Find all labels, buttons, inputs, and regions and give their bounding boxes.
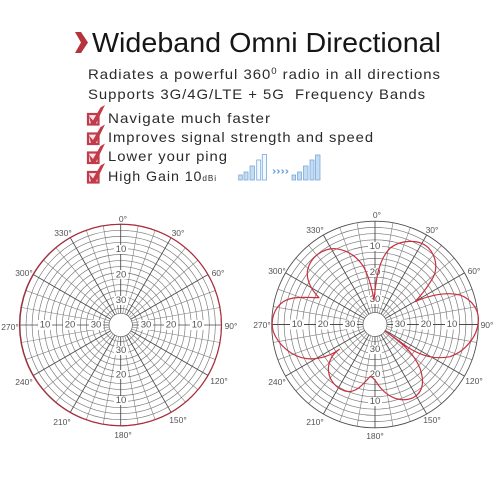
item: navigate: Navigate much faster bbox=[108, 110, 271, 126]
left angle labels: 60° bbox=[212, 268, 224, 278]
left angle labels: 150° bbox=[169, 415, 187, 425]
left angle labels: 240° bbox=[15, 377, 33, 387]
right angle labels: 150° bbox=[423, 415, 441, 425]
left angle labels: 90° bbox=[225, 321, 237, 331]
right angle labels: 60° bbox=[468, 266, 480, 276]
right angle labels: 210° bbox=[306, 417, 324, 427]
icon: red chevron bbox=[75, 32, 88, 53]
right radial scale labels: 10 bbox=[447, 319, 457, 330]
left angle labels bbox=[1, 214, 237, 440]
left angle labels: 270° bbox=[1, 322, 19, 332]
right angle labels: 180° bbox=[366, 431, 384, 441]
right angle labels: 240° bbox=[268, 377, 286, 387]
right angle labels: 300° bbox=[268, 266, 286, 276]
right radial scale labels bbox=[290, 241, 459, 407]
left angle labels: 330° bbox=[54, 228, 72, 238]
left radial scale labels: 10 bbox=[116, 395, 126, 406]
chart: left polar omni pattern bbox=[1, 214, 237, 440]
right radial scale labels: 20 bbox=[318, 319, 328, 330]
title: Wideband Omni Directional bbox=[92, 27, 441, 58]
left radial scale labels: 30 bbox=[116, 345, 126, 356]
right angle labels: 0° bbox=[373, 210, 381, 220]
left radial scale labels: 30 bbox=[141, 320, 151, 330]
item: lower ping: Lower your ping bbox=[108, 148, 228, 164]
right angle labels: 120° bbox=[465, 376, 483, 386]
right angle labels: 90° bbox=[481, 320, 493, 330]
item: improves: Improves signal strength and speed bbox=[108, 129, 374, 145]
left radial scale labels: 20 bbox=[65, 320, 75, 330]
text: radiates line: 0 bbox=[271, 66, 278, 76]
left angle labels: 210° bbox=[53, 417, 71, 427]
right radial scale labels: 30 bbox=[370, 344, 380, 355]
left radial scale labels: 20 bbox=[166, 320, 176, 330]
item: high gain bbox=[88, 163, 217, 184]
right angle labels: 270° bbox=[253, 320, 271, 330]
right angle labels bbox=[253, 210, 493, 441]
left radial scale labels: 30 bbox=[116, 295, 126, 306]
right radial scale labels: 20 bbox=[421, 319, 431, 330]
item: high gain: High Gain 10dBi bbox=[108, 168, 217, 184]
left radial scale labels: 10 bbox=[40, 320, 50, 330]
item: improves bbox=[88, 124, 374, 145]
right radial scale labels: 10 bbox=[370, 241, 380, 252]
chart: right polar lobed pattern bbox=[253, 210, 493, 441]
right angle labels: 330° bbox=[306, 225, 324, 235]
item: lower ping bbox=[88, 144, 228, 164]
checklist bbox=[88, 105, 374, 184]
text: radiates line: radio in all directions bbox=[278, 66, 441, 82]
right radial scale labels: 10 bbox=[370, 396, 380, 407]
left radial scale labels: 20 bbox=[116, 270, 126, 280]
icon: signal bars upgrade: ›››› bbox=[272, 166, 289, 177]
right radial scale labels: 30 bbox=[345, 319, 355, 330]
left angle labels: 180° bbox=[114, 430, 132, 440]
left radial scale labels: 30 bbox=[91, 320, 101, 330]
left angle labels: 300° bbox=[15, 268, 33, 278]
right radial scale labels: 20 bbox=[370, 369, 380, 380]
text: radiates line: Radiates a powerful 360 bbox=[88, 66, 260, 82]
icon: signal bars upgrade bbox=[239, 154, 320, 180]
right angle labels: 30° bbox=[426, 225, 438, 235]
right red pattern curve bbox=[272, 241, 478, 400]
right radial scale labels: 30 bbox=[370, 294, 380, 305]
left radial scale labels bbox=[38, 244, 204, 406]
left radial scale labels: 10 bbox=[192, 320, 202, 330]
left angle labels: 0° bbox=[119, 214, 127, 224]
item: navigate bbox=[88, 105, 271, 126]
left angle labels: 120° bbox=[210, 376, 228, 386]
right radial scale labels: 20 bbox=[370, 267, 380, 278]
text: supports line: Supports 3G/4G/LTE + 5G Frequency Bands bbox=[88, 86, 426, 102]
left red pattern curve bbox=[20, 224, 222, 426]
left radial scale labels: 10 bbox=[116, 244, 126, 255]
right radial scale labels: 30 bbox=[395, 319, 405, 330]
left angle labels: 30° bbox=[172, 228, 184, 238]
right radial scale labels: 10 bbox=[292, 319, 302, 330]
left radial scale labels: 20 bbox=[116, 370, 126, 380]
